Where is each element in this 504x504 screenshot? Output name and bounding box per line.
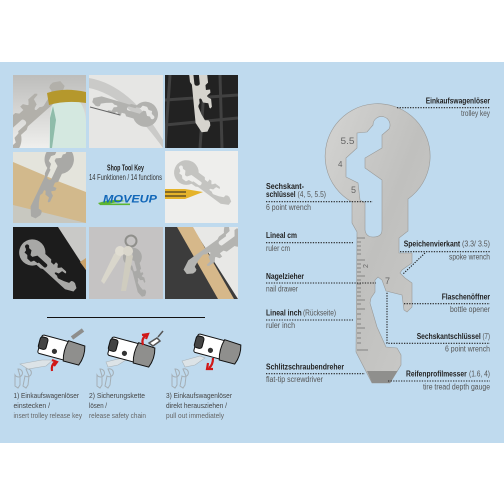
wrench sizes: 7: [385, 276, 390, 286]
logo: MoveUp: MOVEUP: [103, 194, 158, 206]
callout: 6 point wrench 4 5 5.5: Sechskant-: [266, 182, 304, 191]
tag: [182, 356, 205, 367]
photo: bottle opener: [13, 75, 86, 148]
callout: nail drawer: nail drawer: [266, 285, 298, 294]
photo: tire tread: [165, 75, 238, 148]
callout: ruler inch: Lineal inch: [266, 309, 302, 318]
wrench sizes: 5.5: [340, 136, 354, 146]
callout: 6 point wrench 7: 6 point wrench: [445, 345, 490, 354]
step 3 text: [166, 391, 232, 420]
callout: ruler cm: ruler cm: [266, 244, 290, 253]
photo: key on key ring: [89, 227, 163, 299]
photo: key on dark board: [13, 227, 86, 300]
callout: trolley key: [397, 96, 490, 118]
callout: ruler cm: [266, 231, 353, 253]
wrench sizes: 5: [351, 185, 356, 195]
step 1 text: [14, 391, 82, 420]
main tool key diagram: [325, 104, 430, 383]
chain plug: [149, 331, 163, 346]
callout: flat-tip screwdriver: [266, 362, 365, 384]
step 3 illustration: [172, 332, 242, 388]
arrow: [142, 334, 148, 345]
ruler ticks: [357, 238, 368, 350]
callout: nail drawer: [266, 272, 376, 294]
step 3 text: direkt herausziehen /: [166, 401, 228, 410]
callout: tire tread depth gauge: [388, 370, 490, 391]
divider line: [47, 317, 205, 318]
device: [106, 335, 156, 368]
step 2 text: lösen /: [89, 401, 108, 410]
wrench sizes: [338, 136, 390, 286]
callout: ruler cm: Lineal cm: [266, 231, 297, 240]
step 3 text: pull out immediately: [166, 411, 224, 420]
callout: ruler inch: ruler inch: [266, 321, 295, 330]
callout: 6 point wrench 7: (7): [482, 332, 490, 341]
device: [192, 332, 242, 365]
callout: flat-tip screwdriver: Schlitzschraubendreher: [266, 362, 344, 371]
photo grid: [13, 75, 238, 299]
callout: ruler inch: (Rückseite): [303, 309, 336, 318]
tag: [106, 358, 126, 367]
photo: key on dark surface with wood edge: [165, 227, 238, 299]
callout: 6 point wrench 7: [387, 293, 490, 354]
wrench sizes: 4: [338, 160, 343, 169]
callout: tire tread depth gauge: tire tread depth gauge: [423, 382, 490, 391]
callout: bottle opener: [404, 292, 490, 314]
callout: spoke wrench: Speichenvierkant: [404, 240, 460, 249]
key body: [325, 104, 430, 383]
photo: key with pencil: [165, 151, 238, 223]
keys outline: [97, 369, 113, 388]
plug: [72, 330, 83, 338]
callout: 6 point wrench 4 5 5.5: [266, 182, 373, 212]
step 1 text: insert trolley release key: [14, 411, 82, 420]
step 1 text: einstecken /: [14, 401, 51, 410]
step 3 text: 3) Einkaufswagenlöser: [166, 391, 232, 400]
callout: trolley key: Einkaufswagenlöser: [426, 96, 490, 105]
callout: 6 point wrench 7: Sechskantschlüssel: [417, 332, 481, 341]
callout: tire tread depth gauge: (1.6, 4): [469, 370, 490, 379]
product title: Shop Tool Key: [107, 164, 144, 173]
device: [36, 333, 86, 366]
callout: 6 point wrench 4 5 5.5: 6 point wrench: [266, 203, 311, 212]
callout: ruler inch: [266, 309, 353, 330]
step 1 text: 1) Einkaufswagenlöser: [14, 391, 79, 400]
product title: 14 Funktionen / 14 functions: [89, 173, 162, 182]
background panel: [0, 62, 504, 443]
arrow: [207, 358, 213, 369]
arrow: [52, 360, 57, 371]
photo: key in trolley: [89, 75, 163, 148]
callout: bottle opener: bottle opener: [450, 305, 490, 314]
step 1 illustration: [15, 330, 86, 388]
callout: nail drawer: Nagelzieher: [266, 272, 304, 281]
photo: key in trolley coin slot on wood: [13, 152, 86, 223]
callout: spoke wrench: [400, 240, 490, 274]
tag: [20, 360, 53, 369]
step 2 illustration: [97, 331, 163, 388]
callout: tire tread depth gauge: Reifenprofilmesser: [406, 370, 467, 379]
callout: flat-tip screwdriver: flat-tip screwdriver: [266, 375, 323, 384]
callout: trolley key: trolley key: [461, 109, 490, 118]
keys outline: [172, 369, 188, 388]
product title: [89, 164, 162, 182]
callout: bottle opener: Flaschenöffner: [442, 292, 490, 301]
step 2 text: release safety chain: [89, 411, 146, 420]
keys outline: [15, 369, 31, 388]
step 2 text: [89, 391, 146, 420]
callout: spoke wrench: spoke wrench: [449, 252, 490, 261]
screwdriver tip band: [367, 371, 398, 383]
wrench sizes: 2: [363, 264, 370, 268]
callout: 6 point wrench 4 5 5.5: schlüssel: [266, 190, 296, 199]
step 2 text: 2) Sicherungskette: [89, 391, 145, 400]
callout: spoke wrench: (3.3/ 3.5): [462, 240, 490, 249]
callout: 6 point wrench 4 5 5.5: (4, 5, 5.5): [298, 190, 326, 199]
